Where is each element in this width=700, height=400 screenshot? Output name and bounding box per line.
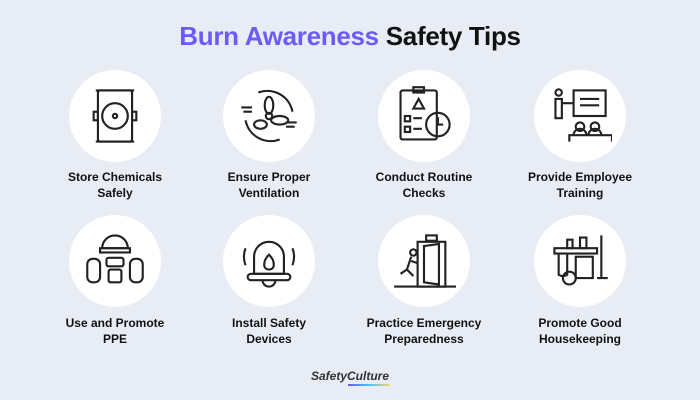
logo: SafetyCulture [311, 369, 389, 383]
icon: emergency exit [378, 215, 470, 307]
label: training: Provide Employee [528, 170, 632, 184]
label: safety devices: Install Safety [232, 316, 306, 330]
label: housekeeping: Promote Good [538, 316, 622, 330]
icon: fire alarm bell [223, 215, 315, 307]
icon: cleaning cart [534, 215, 626, 307]
title: Burn Awareness Safety Tips [179, 21, 521, 51]
label: housekeeping [538, 316, 622, 346]
label: ventilation: Ventilation [239, 186, 299, 200]
icon: ventilation fan [223, 70, 315, 162]
label: emergency preparedness: Preparedness [384, 332, 464, 346]
label: PPE: PPE [103, 332, 127, 346]
label: safety devices [232, 316, 306, 346]
label: store chemicals: Safely [97, 186, 133, 200]
label: emergency preparedness: Practice Emergency [367, 316, 481, 330]
icon: training [534, 70, 626, 162]
label: store chemicals [68, 170, 162, 200]
icon: checklist clock [378, 70, 470, 162]
icon: chemical barrel [69, 70, 161, 162]
label: ventilation [228, 170, 310, 200]
label: routine checks: Conduct Routine [376, 170, 472, 184]
label: ventilation: Ensure Proper [228, 170, 310, 184]
label: PPE [66, 316, 164, 346]
label: PPE: Use and Promote [66, 316, 164, 330]
icon: PPE [69, 215, 161, 307]
label: emergency preparedness [367, 316, 482, 346]
label: store chemicals: Store Chemicals [68, 170, 162, 184]
label: safety devices: Devices [246, 332, 292, 346]
label: training: Training [557, 186, 603, 200]
label: training [528, 170, 632, 200]
label: housekeeping: Housekeeping [539, 332, 621, 346]
label: routine checks [376, 170, 472, 200]
label: routine checks: Checks [403, 186, 445, 200]
